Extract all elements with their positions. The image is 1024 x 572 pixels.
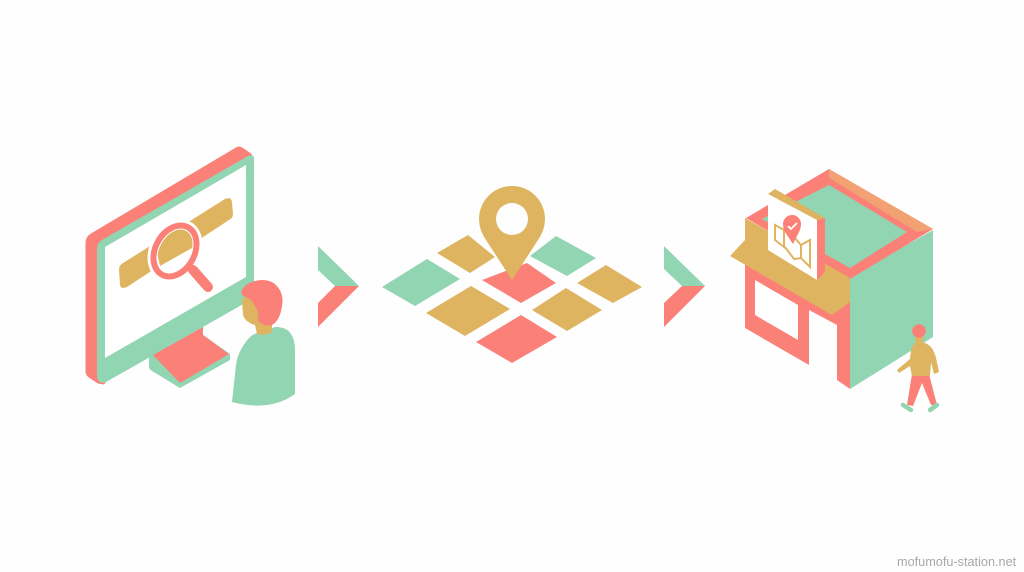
location pin — [479, 186, 545, 280]
shop side wall — [850, 230, 933, 389]
sign pin icon — [783, 215, 801, 244]
monitor stand base — [149, 327, 230, 388]
arrow: step one to two — [318, 246, 359, 327]
shop sign — [768, 189, 825, 280]
map tiles — [382, 235, 642, 363]
watermark: mofumofu-station.net — [897, 555, 1017, 569]
shop window — [755, 280, 798, 340]
panel: shop visit — [730, 169, 939, 410]
person at the monitor — [232, 280, 295, 406]
sign map icon — [775, 225, 810, 267]
monitor front bezel — [97, 155, 254, 383]
walking person — [897, 324, 939, 410]
shop roof — [746, 169, 933, 279]
awning — [730, 218, 850, 315]
magnifying glass — [148, 222, 213, 292]
panel: map with location pin — [382, 186, 642, 363]
search bar — [119, 198, 233, 288]
infographic: search, locate, visit flow — [86, 146, 1016, 566]
panel: online search — [86, 147, 295, 406]
monitor side edge — [86, 147, 253, 384]
monitor screen — [105, 165, 246, 358]
arrow: step two to three — [664, 246, 705, 327]
shop front wall — [745, 260, 850, 389]
